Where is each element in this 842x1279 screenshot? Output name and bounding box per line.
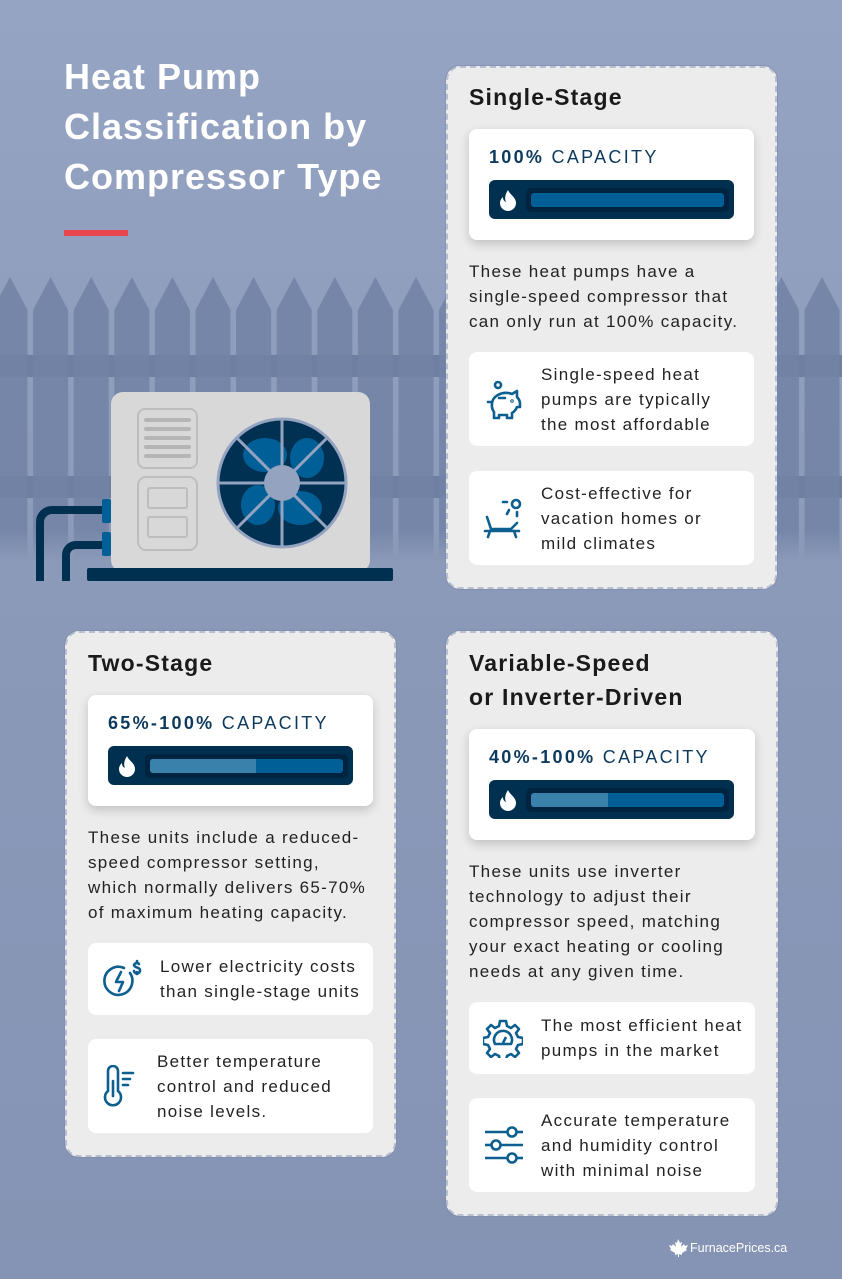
item: affordable xyxy=(469,352,754,446)
item text xyxy=(160,957,360,1001)
title: Heat Pump xyxy=(64,56,261,97)
icon: piggy bank xyxy=(486,380,522,420)
text: variable-speed description: your exact heating or cooling xyxy=(469,937,724,956)
item: temperature control xyxy=(88,1039,373,1133)
capacity bar xyxy=(489,780,734,819)
heading: two-stage: Two-Stage xyxy=(88,650,213,676)
icon: sliders xyxy=(485,1126,523,1164)
heading: variable-speed xyxy=(469,650,684,710)
item text xyxy=(541,484,702,553)
capacity bar xyxy=(489,180,734,219)
panel: two-stage xyxy=(65,631,396,1157)
heading: variable-speed: Variable-Speed xyxy=(469,650,651,676)
item text: Better temperature xyxy=(157,1052,322,1071)
panel: variable-speed xyxy=(446,631,778,1216)
logo: FurnacePrices.ca: FurnacePrices.ca xyxy=(690,1241,787,1255)
text: two-stage description xyxy=(88,828,366,922)
item: most efficient xyxy=(469,1002,755,1074)
icon: thermometer xyxy=(104,1065,134,1106)
item: vacation homes xyxy=(469,471,754,565)
item text: pumps are typically xyxy=(541,390,711,409)
item text: pumps in the market xyxy=(541,1041,720,1060)
item: lower electricity costs xyxy=(88,943,373,1015)
item text xyxy=(541,365,711,434)
title: Compressor Type xyxy=(64,156,382,197)
item text: the most affordable xyxy=(541,415,711,434)
item text xyxy=(541,1111,730,1180)
capacity box: 65-100% xyxy=(88,695,373,806)
text: variable-speed description xyxy=(469,862,724,981)
capacity label: 100% CAPACITY xyxy=(489,147,659,167)
heading: single-stage: Single-Stage xyxy=(469,84,623,110)
capacity bar xyxy=(108,746,353,785)
text: single-stage description: These heat pumps have a xyxy=(469,262,695,281)
capacity label: 65%-100% CAPACITY xyxy=(108,713,329,733)
title: Classification by xyxy=(64,106,367,147)
text: two-stage description: speed compressor setting, xyxy=(88,853,320,872)
text: single-stage description: can only run at 100% capacity. xyxy=(469,312,738,331)
text: variable-speed description: compressor speed, matching xyxy=(469,912,721,931)
icon: lounge chair xyxy=(484,498,522,538)
item text: Accurate temperature xyxy=(541,1111,730,1130)
item: accurate control xyxy=(469,1098,755,1192)
text: two-stage description: of maximum heating capacity. xyxy=(88,903,348,922)
item text: The most efficient heat xyxy=(541,1016,743,1035)
item text: noise levels. xyxy=(157,1102,267,1121)
item text: Cost-effective for xyxy=(541,484,693,503)
text: single-stage description xyxy=(469,262,738,331)
text: two-stage description: which normally delivers 65-70% xyxy=(88,878,366,897)
item text: and humidity control xyxy=(541,1136,719,1155)
text: variable-speed description: technology to adjust their xyxy=(469,887,692,906)
panel: single-stage xyxy=(446,66,777,589)
capacity box: 40-100% xyxy=(469,729,755,840)
item text: Single-speed heat xyxy=(541,365,700,384)
item text: control and reduced xyxy=(157,1077,332,1096)
item text: with minimal noise xyxy=(541,1161,703,1180)
text: variable-speed description: These units use inverter xyxy=(469,862,682,881)
illustration: heat pump unit xyxy=(36,392,393,581)
capacity box: 100% xyxy=(469,129,754,240)
item text xyxy=(157,1052,332,1121)
item text: mild climates xyxy=(541,534,656,553)
background fence xyxy=(0,277,842,551)
text: two-stage description: These units include a reduced- xyxy=(88,828,359,847)
capacity label: 40%-100% CAPACITY xyxy=(489,747,710,767)
icon: gear gauge xyxy=(483,1020,523,1058)
item text xyxy=(541,1016,743,1060)
text: variable-speed description: needs at any given time. xyxy=(469,962,684,981)
item text: Lower electricity costs xyxy=(160,957,356,976)
title underline accent xyxy=(64,230,128,236)
logo: FurnacePrices.ca xyxy=(669,1239,788,1257)
item text: vacation homes or xyxy=(541,509,702,528)
text: single-stage description: single-speed compressor that xyxy=(469,287,728,306)
title xyxy=(64,56,382,197)
heading: variable-speed: or Inverter-Driven xyxy=(469,684,684,710)
icon: power dollar xyxy=(103,960,142,996)
item text: than single-stage units xyxy=(160,982,360,1001)
